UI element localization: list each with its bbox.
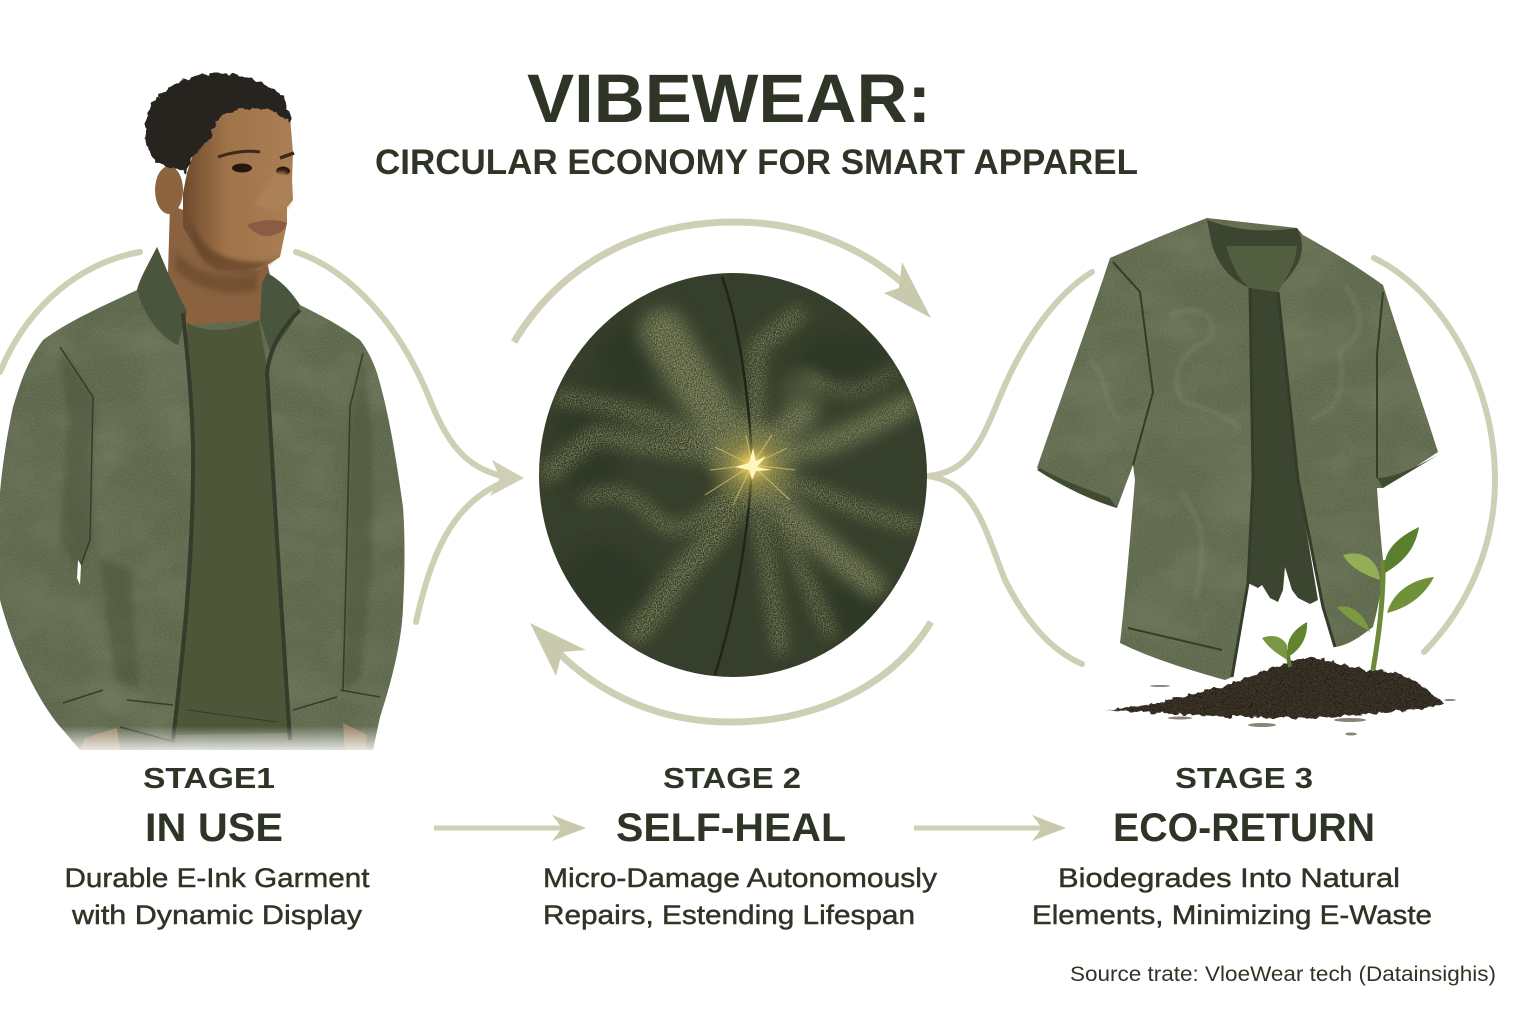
garment seams and hems	[1113, 262, 1383, 677]
eyes and brows	[218, 151, 294, 176]
underarm gap	[77, 560, 81, 585]
soft fibre glow	[663, 332, 907, 585]
illustration: man wearing e-ink jacket	[0, 73, 410, 756]
inner neck lining	[1226, 246, 1297, 292]
ear	[155, 166, 183, 214]
stage 3 label: ECO-RETURN	[1113, 806, 1375, 850]
arrow: paths from the circle toward the garment	[928, 258, 1495, 664]
fade at garment bottom	[0, 726, 410, 756]
small seedling	[1262, 622, 1307, 667]
t-shirt	[173, 320, 290, 735]
stage 2 label: SELF-HEAL	[616, 806, 846, 850]
nose and mouth	[247, 172, 290, 236]
arrow: stage 1 to stage 2	[434, 815, 586, 841]
title: CIRCULAR ECONOMY FOR SMART APPAREL	[375, 143, 1138, 182]
stage 1 label: with Dynamic Display	[71, 900, 363, 930]
illustration: self-healing fabric disc	[539, 273, 927, 677]
stage 2 label: STAGE 2	[663, 763, 801, 795]
hair	[145, 73, 290, 173]
sleeve cuff openings	[1037, 455, 1438, 508]
tall seedling	[1337, 527, 1434, 670]
source note: Source trate: VloeWear tech (Datainsighis)	[1070, 963, 1496, 986]
shirt body and sleeves	[1037, 218, 1438, 680]
scattered soil specks	[1150, 685, 1456, 736]
healing glow	[700, 417, 804, 513]
stage 2 label	[543, 763, 938, 930]
arrow: upper arc over the circle	[514, 222, 931, 342]
arrow: lower arc under the circle	[530, 622, 931, 722]
stage 3 label: Elements, Minimizing E-Waste	[1032, 900, 1432, 930]
stage 1 label: Durable E-Ink Garment	[64, 863, 370, 893]
title: VIBEWEAR:	[527, 60, 931, 137]
stage 2 label: Repairs, Estending Lifespan	[543, 900, 915, 930]
stage 2 label: Micro-Damage Autonomously	[543, 863, 938, 893]
dark patches	[560, 325, 890, 640]
jacket shading	[60, 347, 372, 690]
stage 3 label	[1032, 763, 1432, 930]
jacket collar	[137, 247, 300, 352]
title	[375, 60, 1138, 182]
stage 1 label: STAGE1	[143, 763, 275, 795]
jaw shadow	[188, 215, 280, 273]
neck	[168, 205, 270, 334]
light rays	[705, 435, 795, 505]
jacket zipper and seams	[60, 310, 380, 742]
soil mound	[1107, 658, 1456, 736]
face	[183, 103, 293, 273]
hands	[80, 723, 367, 750]
arrow: large loop behind the man into the centre circle	[0, 252, 524, 622]
glowing fibre swirls	[550, 315, 913, 648]
arrow: stage 2 to stage 3	[914, 815, 1066, 841]
neck shadow	[175, 250, 258, 293]
stage 3 label: Biodegrades Into Natural	[1058, 863, 1400, 893]
illustration: biodegrading garment with seedlings	[1037, 218, 1456, 736]
stage 3 label: STAGE 3	[1175, 763, 1313, 795]
healing seam	[715, 277, 752, 675]
inner shirt back	[1207, 220, 1318, 604]
jacket	[0, 247, 404, 750]
stage 1 label	[64, 763, 370, 930]
stage 1 label: IN USE	[145, 806, 283, 850]
light swirl marks	[1090, 285, 1360, 600]
